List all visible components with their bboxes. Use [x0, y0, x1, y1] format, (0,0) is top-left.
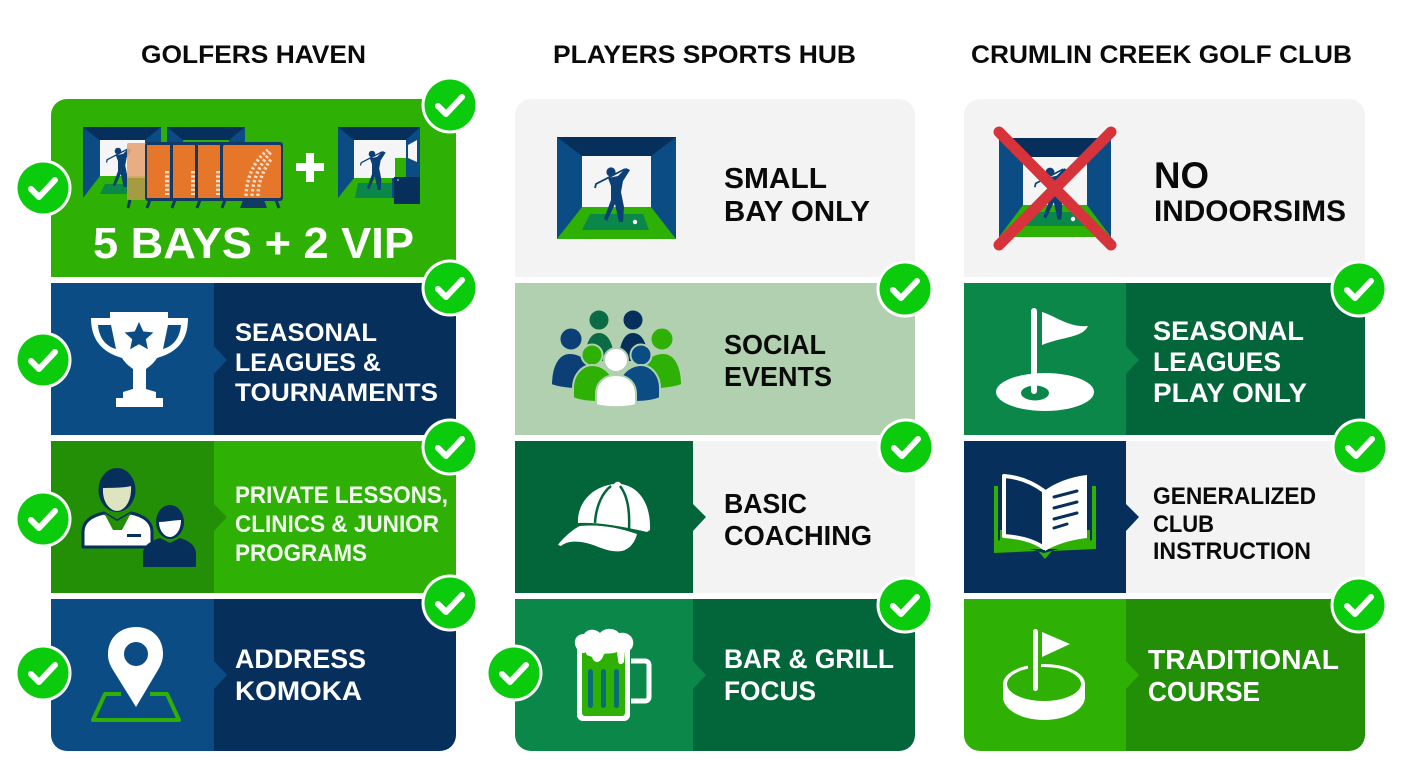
- icon: flag on green: [996, 308, 1094, 411]
- label: seasonal leagues and tournaments: [235, 319, 438, 407]
- icon: plus sign: [296, 153, 324, 182]
- icon: group of people: [551, 310, 682, 407]
- label: traditional course: TRADITIONAL: [1148, 644, 1339, 675]
- label: bar and grill focus: [724, 644, 894, 706]
- label: seasonal leagues play only: LEAGUES: [1153, 347, 1281, 377]
- row: small bay only: [515, 99, 915, 277]
- row: generalized club instruction: [964, 441, 1365, 593]
- label: seasonal leagues and tournaments: SEASONAL: [235, 319, 377, 347]
- icon: second simulator bay: [167, 127, 245, 147]
- label: private lessons, clinics and junior programs: CLINICS & JUNIOR: [235, 511, 439, 538]
- icon: coach and junior: [83, 468, 196, 567]
- label: generalized club instruction: CLUB: [1153, 511, 1214, 538]
- label: private lessons, clinics and junior programs: [235, 482, 448, 567]
- label: address Komoka: ADDRESS: [235, 644, 366, 674]
- label: social events: SOCIAL: [724, 329, 826, 360]
- label: seasonal leagues play only: [1153, 316, 1307, 408]
- label: seasonal leagues and tournaments: LEAGUES &: [235, 349, 381, 377]
- row: seasonal leagues and tournaments: [51, 283, 456, 435]
- label: small bay only: SMALL: [724, 163, 827, 195]
- label: social events: EVENTS: [724, 361, 832, 392]
- label: basic coaching: [724, 488, 872, 551]
- label: address Komoka: [235, 644, 366, 706]
- row: bar and grill focus: [515, 599, 915, 751]
- label: bar and grill focus: FOCUS: [724, 676, 816, 706]
- label: no indoor sims: INDOORSIMS: [1154, 195, 1346, 228]
- label: address Komoka: KOMOKA: [235, 676, 362, 706]
- label: seasonal leagues and tournaments: TOURNAMENTS: [235, 379, 438, 407]
- panel: Crumlin Creek Golf Club column: [964, 99, 1365, 751]
- icon: crossed-out simulator bay: [999, 132, 1111, 245]
- row: seasonal leagues play only: [964, 283, 1365, 435]
- title: Golfers Haven: GOLFERS HAVEN: [141, 41, 366, 69]
- label: generalized club instruction: [1153, 483, 1316, 565]
- row: private lessons, clinics and junior programs: [51, 441, 456, 593]
- panel: Golfers Haven column: [51, 99, 456, 751]
- label: traditional course: COURSE: [1148, 676, 1260, 707]
- checkmarks: all badges: [14, 76, 1388, 702]
- title: Players Sports Hub: PLAYERS SPORTS HUB: [553, 41, 856, 69]
- label: seasonal leagues play only: SEASONAL: [1153, 316, 1304, 346]
- icon: trophy: [91, 312, 188, 407]
- icon: beer mug: [575, 629, 649, 721]
- icon: open book: [994, 475, 1096, 559]
- label: bar and grill focus: BAR & GRILL: [724, 644, 894, 674]
- label: private lessons, clinics and junior programs: PRIVATE LESSONS,: [235, 482, 448, 509]
- icon: VIP simulator bay: [338, 127, 420, 204]
- row: no indoor sims: [964, 99, 1365, 277]
- label: small bay only: BAY ONLY: [724, 196, 870, 228]
- panel: Players Sports Hub column: [515, 99, 915, 751]
- label: social events: [724, 329, 832, 392]
- row: traditional course: [964, 599, 1365, 751]
- row: 5 bays + 2 VIP: [51, 99, 456, 277]
- row: address Komoka: [51, 599, 456, 751]
- label: private lessons, clinics and junior programs: PROGRAMS: [235, 540, 367, 567]
- label: no indoor sims: NO: [1154, 155, 1209, 196]
- label: seasonal leagues play only: PLAY ONLY: [1153, 378, 1307, 408]
- label: 5 bays + 2 VIP: 5 BAYS + 2 VIP: [93, 219, 414, 268]
- icon: orange simulator screens: [127, 142, 283, 208]
- row: basic coaching: [515, 441, 915, 593]
- label: basic coaching: COACHING: [724, 520, 872, 551]
- label: basic coaching: BASIC: [724, 488, 807, 519]
- row: social events: [515, 283, 915, 435]
- icon: simulator bay: [557, 137, 676, 239]
- icon: baseball cap: [558, 482, 650, 551]
- icon: first simulator bay: [83, 127, 161, 198]
- label: no indoor sims: [1154, 155, 1346, 228]
- label: traditional course: [1148, 644, 1339, 707]
- title: Crumlin Creek Golf Club: CRUMLIN CREEK GOLF CLUB: [971, 41, 1352, 69]
- icon: flag on round green: [1003, 629, 1085, 720]
- label: generalized club instruction: GENERALIZED: [1153, 483, 1316, 510]
- label: small bay only: [724, 163, 870, 228]
- label: generalized club instruction: INSTRUCTION: [1153, 538, 1311, 565]
- icon: map pin: [93, 627, 179, 720]
